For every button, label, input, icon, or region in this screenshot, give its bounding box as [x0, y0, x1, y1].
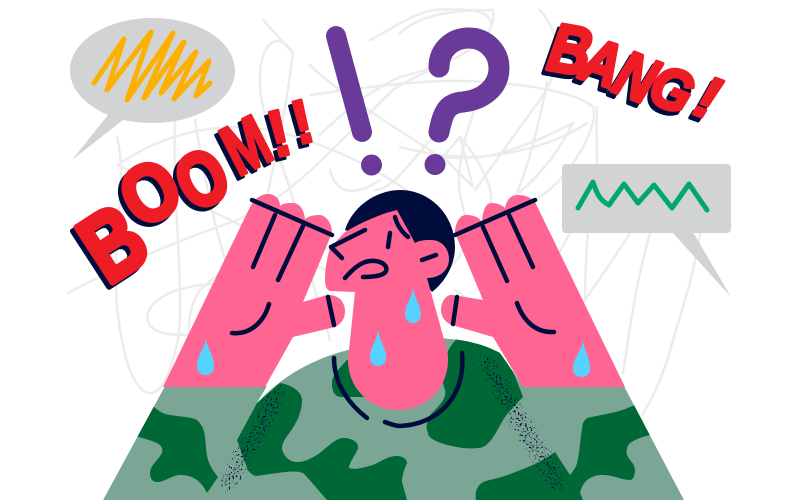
sound effect: BOOM!!: B [61, 183, 166, 303]
face, neck and ear [325, 210, 449, 410]
sound effect: BOOM!!: M [209, 100, 284, 191]
sound effect: BANG!: B [543, 10, 597, 91]
sound effect: BOOM!!: O [104, 140, 196, 245]
sound effect: BOOM!!: ! [284, 85, 320, 158]
hair [345, 190, 455, 292]
sound effect: BANG! [543, 10, 729, 133]
icon: sweat drop on cheek [405, 288, 421, 323]
eye [388, 233, 390, 247]
eyebrow [395, 217, 408, 237]
icon: sweat drop [573, 341, 590, 377]
speech bubble: green zigzag [562, 164, 731, 297]
mouth [345, 261, 386, 278]
icon: sweat drop [197, 339, 214, 375]
speech bubble: orange scribble [70, 18, 235, 160]
speckle shading [228, 360, 558, 484]
sound effect: BANG!: N [605, 38, 668, 118]
icon: sweat drop on neck [370, 330, 386, 366]
right hand [441, 195, 625, 387]
nose [331, 230, 365, 258]
sound effect: BANG!: ! [686, 63, 729, 133]
sound effect: BOOM!!: ! [260, 95, 298, 172]
background scribble [68, 9, 700, 415]
head and neck [325, 190, 462, 426]
sound effect: BANG!: A [572, 25, 630, 102]
sound effect: BOOM!!: O [161, 130, 243, 228]
icon: purple question mark [424, 38, 499, 175]
left hand [163, 194, 345, 387]
sound effect: BOOM!! [61, 85, 320, 303]
icon: purple exclamation mark [336, 36, 382, 176]
sound effect: BANG!: G [641, 51, 703, 127]
camouflage shirt [103, 335, 684, 500]
ear line [422, 255, 436, 260]
collar [334, 358, 367, 418]
